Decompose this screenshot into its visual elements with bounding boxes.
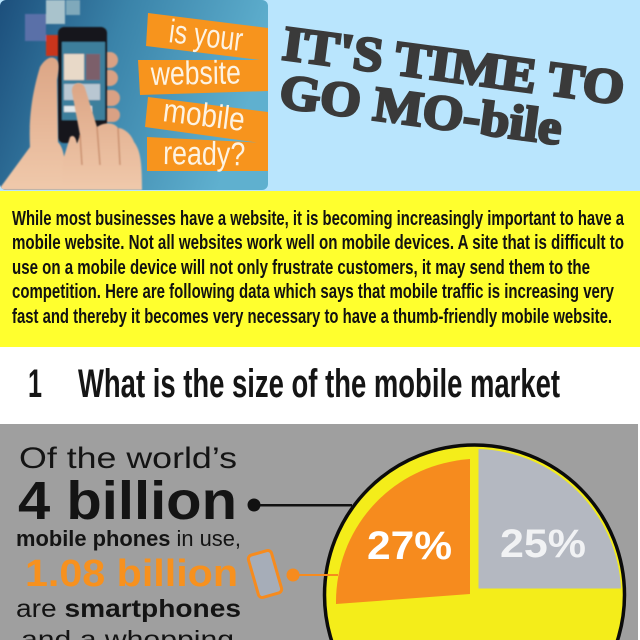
connector: 1.08 billion	[286, 568, 338, 582]
back hand fingers	[106, 51, 121, 123]
stat text: are smartphones	[16, 595, 241, 623]
title: IT'S TIME TO	[280, 15, 628, 115]
banner: ready?	[147, 137, 268, 171]
stat text: 4 billion	[18, 471, 237, 531]
banners	[138, 13, 268, 171]
label 27%: 27%	[367, 524, 452, 568]
title	[277, 15, 628, 155]
floating app tiles	[25, 0, 80, 56]
title: GO MO-bile	[277, 63, 565, 155]
banner text: ready?	[163, 134, 246, 172]
banner: mobile	[145, 97, 268, 144]
stat text: Of the world’s	[19, 442, 237, 475]
hands	[0, 57, 142, 190]
banner: is your	[146, 13, 268, 61]
icon: smartphone	[247, 550, 283, 598]
phone	[58, 27, 107, 143]
banner text: website	[150, 53, 241, 92]
banner text: mobile	[161, 91, 247, 138]
statistics panel	[0, 424, 638, 640]
banner: website	[138, 60, 268, 95]
connector: 4 billion	[248, 498, 352, 512]
banner text	[150, 12, 247, 172]
banner text: is your	[167, 12, 245, 58]
header background	[0, 0, 640, 191]
stat text	[16, 442, 241, 640]
stat text: mobile phones in use,	[16, 526, 241, 551]
pie chart	[324, 445, 624, 640]
section heading: 1	[28, 362, 42, 406]
photo: hands holding a phone with is your website mobile ready banners	[0, 0, 268, 190]
label 25%: 25%	[500, 522, 586, 566]
stat text: 1.08 billion	[25, 553, 238, 595]
intro text panel	[0, 191, 640, 347]
intro paragraph	[12, 208, 625, 328]
